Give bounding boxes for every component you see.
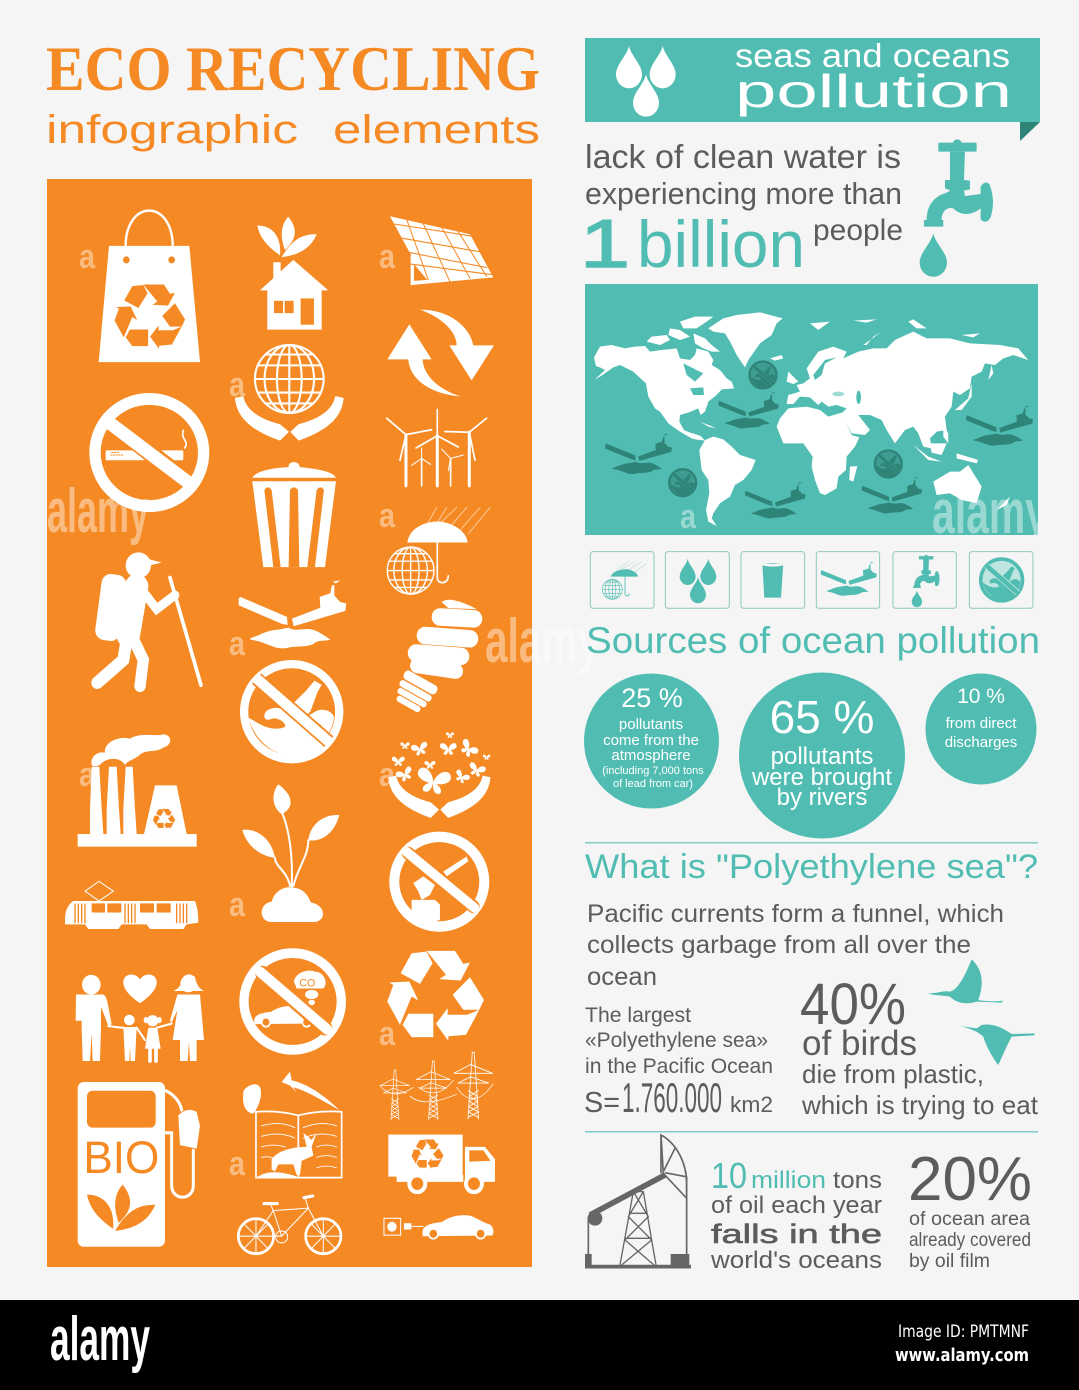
icon: oil pump jack xyxy=(585,1135,691,1267)
icon: no smoking xyxy=(95,399,204,506)
stat: 10 million tons of oil: million xyxy=(751,1167,826,1194)
text block: largest polyethylene sea: in the Pacific Ocean xyxy=(585,1055,773,1078)
text block: lack of clean water: experiencing more than xyxy=(585,176,902,211)
icon: three water drops xyxy=(616,46,676,117)
panel: orange icon board xyxy=(47,179,600,1267)
circle: 25 percent: atmosphere xyxy=(611,747,691,764)
text block: lack of clean water: lack of clean water is xyxy=(585,138,901,175)
icon: energy saving bulb xyxy=(392,600,483,716)
watermarks on orange panel: a xyxy=(379,1015,396,1053)
icon: house with leaves xyxy=(257,217,328,330)
icon: family xyxy=(76,974,204,1061)
text block: pacific currents xyxy=(587,900,1004,991)
panel: world map: a xyxy=(680,498,697,536)
circle: 65 percent xyxy=(739,672,905,838)
icon: no plastic bottles in water xyxy=(244,664,339,759)
icon: nature book with deer xyxy=(243,1072,342,1178)
icon: recycling truck xyxy=(388,1135,495,1192)
circle: 10 percent xyxy=(926,674,1036,784)
chart: pollution source circles xyxy=(584,672,1036,838)
icon: butterflies in hands xyxy=(388,732,490,818)
icon: power pylons xyxy=(380,1052,493,1120)
text block: pacific currents: Pacific currents form a funnel, which xyxy=(587,900,1004,928)
text block: pacific currents: ocean xyxy=(587,963,657,991)
text block: lack of clean water xyxy=(580,138,903,282)
icon row xyxy=(590,552,1033,608)
icon: no car exhaust CO: CO xyxy=(299,977,315,989)
map: no bottle markers xyxy=(669,361,902,496)
icon: flying birds xyxy=(928,959,1035,1065)
title xyxy=(46,33,540,152)
text block: lack of clean water: 1 xyxy=(580,206,630,282)
stat: 10 million tons of oil xyxy=(710,1155,882,1274)
icon: no tree felling xyxy=(394,837,484,927)
circle: 10 percent: 10 % xyxy=(957,685,1005,708)
banner text: seas and oceans xyxy=(735,37,1010,74)
icon: dripping tap xyxy=(920,139,993,277)
circle: 25 percent xyxy=(584,674,719,808)
icons lower half xyxy=(65,732,495,1254)
stat: 10 million tons of oil: of oil each year xyxy=(711,1192,882,1219)
text block: largest polyethylene sea: «Polyethylene sea» xyxy=(585,1029,768,1052)
watermarks on orange panel xyxy=(47,238,600,1183)
stat: 20 percent of ocean area: of ocean area xyxy=(909,1209,1030,1230)
tile: glass of water xyxy=(762,563,783,598)
watermarks on orange panel: a xyxy=(379,238,396,276)
stat: 40 percent of birds xyxy=(800,972,1039,1120)
stat: 20 percent of ocean area: 20% xyxy=(908,1145,1032,1214)
stat: 40 percent of birds: which is trying to eat xyxy=(801,1090,1039,1120)
tile: drops xyxy=(680,559,716,603)
text block: pacific currents: collects garbage from all over the xyxy=(587,931,971,959)
icon: oil spill from broken ship xyxy=(239,580,346,648)
text block: largest polyethylene sea: 1.760.000 xyxy=(622,1074,722,1121)
circle: 25 percent: pollutants xyxy=(619,716,683,733)
circle: 65 percent: were brought xyxy=(751,764,892,791)
circle: 10 percent: discharges xyxy=(945,734,1017,751)
stat: 10 million tons of oil: 10 xyxy=(711,1155,747,1196)
watermarks on orange panel: a xyxy=(229,366,246,404)
circle: 10 percent: from direct xyxy=(946,715,1017,732)
watermarks on orange panel: a xyxy=(229,625,246,663)
circle: 25 percent: come from the xyxy=(603,732,699,749)
icon: solar panel xyxy=(389,216,493,285)
icon: no car exhaust CO xyxy=(244,953,341,1050)
icon: shopping bag with recycling symbol xyxy=(99,211,200,362)
subheading: infographic elements: infographic xyxy=(46,108,298,152)
watermarks on orange panel: a xyxy=(229,886,246,924)
text block: lack of clean water: people xyxy=(813,214,903,247)
footer logo: alamy xyxy=(50,1305,150,1374)
icon: umbrella over globe xyxy=(387,508,490,594)
watermarks on orange panel: a xyxy=(379,497,396,535)
icon: trash bin xyxy=(252,462,336,567)
watermarks on orange panel: a xyxy=(79,756,96,794)
circle: 65 percent: 65 % xyxy=(770,691,874,743)
icon: tram xyxy=(65,881,198,929)
icon: globe in hands xyxy=(235,345,344,441)
subheading: infographic elements xyxy=(46,108,540,152)
stat: 40 percent of birds: die from plastic, xyxy=(802,1059,984,1089)
stat: 10 million tons of oil: world's oceans xyxy=(710,1247,882,1274)
icon: recycling symbol xyxy=(387,951,484,1041)
text block: largest polyethylene sea: km2 xyxy=(730,1092,773,1117)
watermarks on orange panel: alamy xyxy=(485,607,600,676)
panel: world map xyxy=(585,284,1048,547)
subheading: infographic elements: elements xyxy=(333,108,540,152)
banner: seas and oceans pollution xyxy=(585,37,1040,141)
icon: bio fuel pump: BIO xyxy=(83,1133,159,1183)
stat: 40 percent of birds: 40% xyxy=(800,972,906,1037)
banner text: pollution xyxy=(735,65,1012,117)
icon: circular arrows xyxy=(387,310,494,396)
map: continents xyxy=(594,312,1028,526)
icon: seedling xyxy=(242,784,339,922)
text block: largest polyethylene sea: The largest xyxy=(585,1004,691,1027)
icon: electric car charging xyxy=(384,1215,493,1239)
circle: 65 percent: pollutants xyxy=(771,743,873,770)
heading: sources of ocean pollution: Sources of ocean pollution xyxy=(586,620,1040,661)
footer url: www.alamy.com xyxy=(895,1345,1029,1366)
watermarks on orange panel: a xyxy=(79,238,96,276)
stat: 10 million tons of oil: falls in the xyxy=(711,1219,882,1249)
watermarks on orange panel: a xyxy=(229,1145,246,1183)
footer image id: Image ID: PMTMNF xyxy=(898,1322,1029,1342)
tile: oil spill xyxy=(821,562,877,596)
icon: bicycle xyxy=(238,1196,341,1254)
watermarks on orange panel: a xyxy=(379,756,396,794)
circle: 25 percent: 25 % xyxy=(621,683,683,713)
circle: 25 percent: of lead from car) xyxy=(613,778,693,790)
stat: 20 percent of ocean area xyxy=(908,1145,1032,1272)
map: oil spills xyxy=(605,392,1033,518)
stat: 20 percent of ocean area: by oil film xyxy=(909,1251,990,1272)
heading: eco recycling: ECO RECYCLING xyxy=(46,33,540,104)
text block: largest polyethylene sea xyxy=(584,1004,773,1121)
icons upper half xyxy=(94,211,494,716)
tile: no bottle xyxy=(981,559,1022,601)
footer bar xyxy=(0,1300,1079,1390)
circle: 25 percent: (including 7,000 tons xyxy=(602,765,704,777)
text block: lack of clean water: billion xyxy=(637,207,805,281)
stat: 20 percent of ocean area: already covered xyxy=(909,1230,1031,1251)
icon: factory with recycling cooling tower xyxy=(78,734,197,847)
watermarks on orange panel: alamy xyxy=(47,477,149,546)
tile: tap xyxy=(912,555,940,607)
icon: hiker xyxy=(94,552,201,686)
text block: largest polyethylene sea: S= xyxy=(584,1087,620,1119)
stat: 10 million tons of oil: tons xyxy=(833,1167,882,1194)
banner text xyxy=(735,37,1012,117)
tile: umbrella and globe xyxy=(602,562,647,599)
circle: 65 percent: by rivers xyxy=(777,784,867,811)
heading: what is polyethylene sea: What is "Polyethylene sea"? xyxy=(585,848,1038,886)
icon: bio fuel pump xyxy=(78,1082,200,1247)
stat: 40 percent of birds: of birds xyxy=(802,1024,917,1063)
icon: wind turbines xyxy=(387,409,487,486)
